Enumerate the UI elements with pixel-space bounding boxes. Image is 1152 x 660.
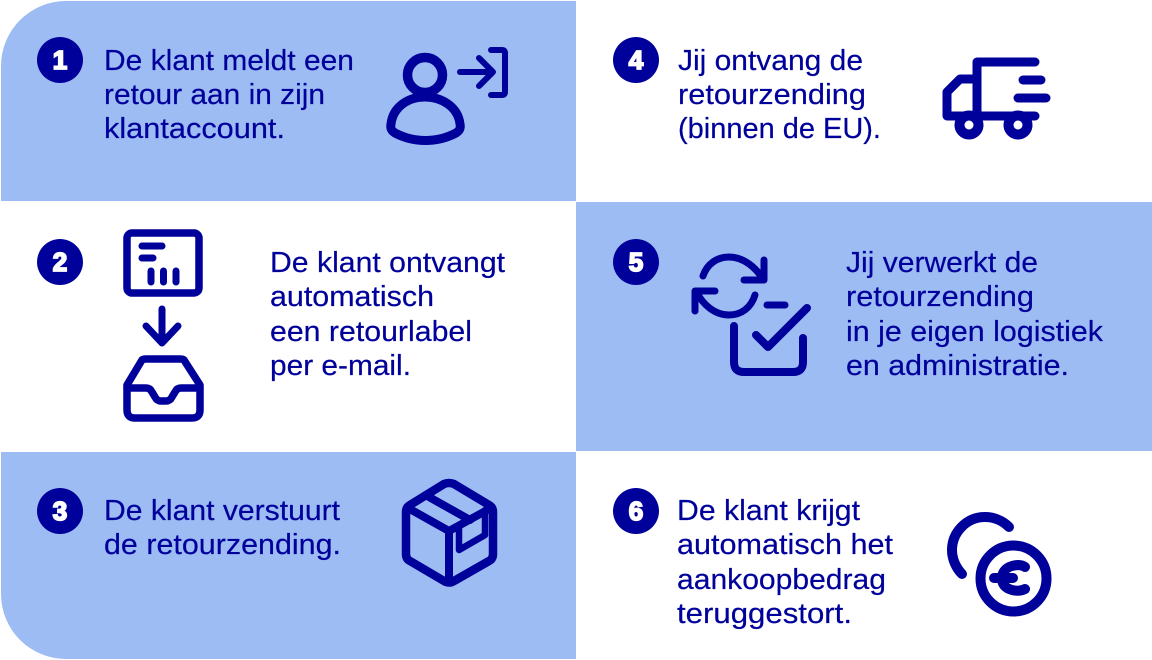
icon: customer logging in bbox=[391, 50, 505, 140]
text: step 2: per e-mail. bbox=[270, 350, 411, 382]
text: step 2: De klant ontvangt bbox=[270, 247, 505, 279]
text: step 6 bbox=[677, 495, 893, 630]
number badge 5 bbox=[613, 239, 659, 285]
number badge 2: 2 bbox=[53, 247, 67, 277]
text: step 6: De klant krijgt bbox=[677, 495, 860, 527]
text: step 3: De klant verstuurt bbox=[104, 495, 340, 527]
number badge 4: 4 bbox=[629, 45, 644, 75]
text: step 5: retourzending bbox=[846, 281, 1034, 313]
panel: step 2 bbox=[1, 202, 576, 451]
number badge 3 bbox=[37, 488, 83, 534]
text: step 2: een retourlabel bbox=[270, 316, 472, 348]
number badge 6 bbox=[613, 488, 659, 534]
panel: step 1 bbox=[1, 1, 576, 201]
number badge 5: 5 bbox=[629, 247, 643, 277]
text: step 5: en administratie. bbox=[846, 350, 1069, 382]
text: step 2: automatisch bbox=[270, 281, 434, 313]
text: step 2 bbox=[270, 247, 505, 382]
icon: label sent to inbox bbox=[127, 233, 200, 418]
number badge 1 bbox=[37, 37, 83, 83]
text: step 5 bbox=[846, 247, 1104, 382]
text: step 5: Jij verwerkt de bbox=[846, 247, 1038, 279]
text: step 1: klantaccount. bbox=[104, 113, 285, 145]
icon: delivery truck bbox=[947, 62, 1046, 134]
text: step 6: aankoopbedrag bbox=[677, 564, 886, 596]
text: step 1 bbox=[104, 45, 354, 145]
number badge 4 bbox=[613, 37, 659, 83]
number badge 2 bbox=[37, 239, 83, 285]
text: step 4: retourzending bbox=[678, 79, 866, 111]
number badge 3: 3 bbox=[53, 496, 67, 526]
panel: step 6 bbox=[576, 452, 1152, 660]
icon: process cycle with checkbox bbox=[695, 257, 807, 372]
text: step 4: Jij ontvang de bbox=[678, 45, 863, 77]
panel: step 5 bbox=[576, 202, 1152, 451]
text: step 3 bbox=[104, 495, 341, 561]
text: step 6: automatisch het bbox=[677, 529, 893, 561]
number badge 1: 1 bbox=[53, 45, 67, 75]
text: step 4 bbox=[678, 45, 881, 145]
icon: parcel box bbox=[406, 483, 493, 582]
text: step 6: teruggestort. bbox=[677, 598, 852, 630]
icon: euro coins bbox=[952, 517, 1046, 612]
text: step 1: De klant meldt een bbox=[104, 45, 354, 77]
text: step 4: (binnen de EU). bbox=[678, 113, 881, 145]
panel: step 3 bbox=[1, 452, 576, 659]
text: step 5: in je eigen logistiek bbox=[846, 316, 1104, 348]
text: step 3: de retourzending. bbox=[104, 529, 341, 561]
panel: step 4 bbox=[576, 1, 1152, 201]
text: step 1: retour aan in zijn bbox=[104, 79, 325, 111]
number badge 6: 6 bbox=[629, 496, 643, 526]
